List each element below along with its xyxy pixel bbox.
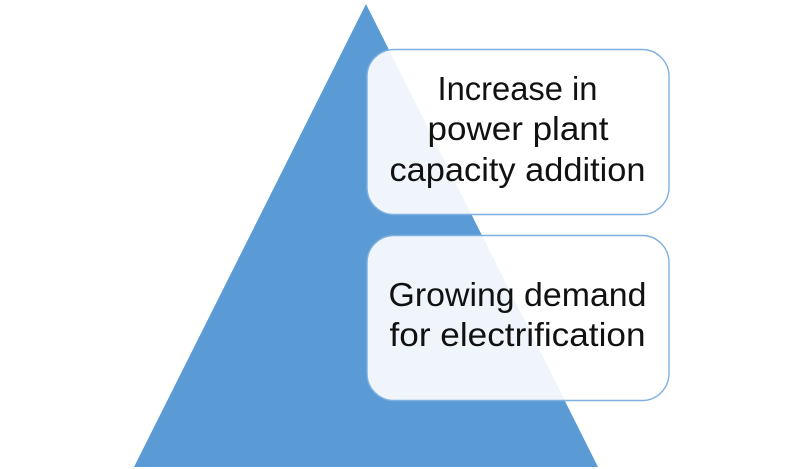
card text: electrification demand — [388, 276, 646, 353]
card text: power plant capacity — [390, 70, 646, 188]
card text: power plant capacity: capacity addition — [390, 151, 646, 188]
card: power plant capacity — [367, 50, 669, 214]
card text: power plant capacity: power plant — [428, 110, 608, 147]
card: electrification demand — [367, 236, 669, 400]
card text: electrification demand: Growing demand — [388, 276, 646, 313]
pyramid triangle — [134, 4, 598, 467]
card text: power plant capacity: Increase in — [438, 70, 598, 107]
card text: electrification demand: for electrification — [390, 316, 646, 353]
